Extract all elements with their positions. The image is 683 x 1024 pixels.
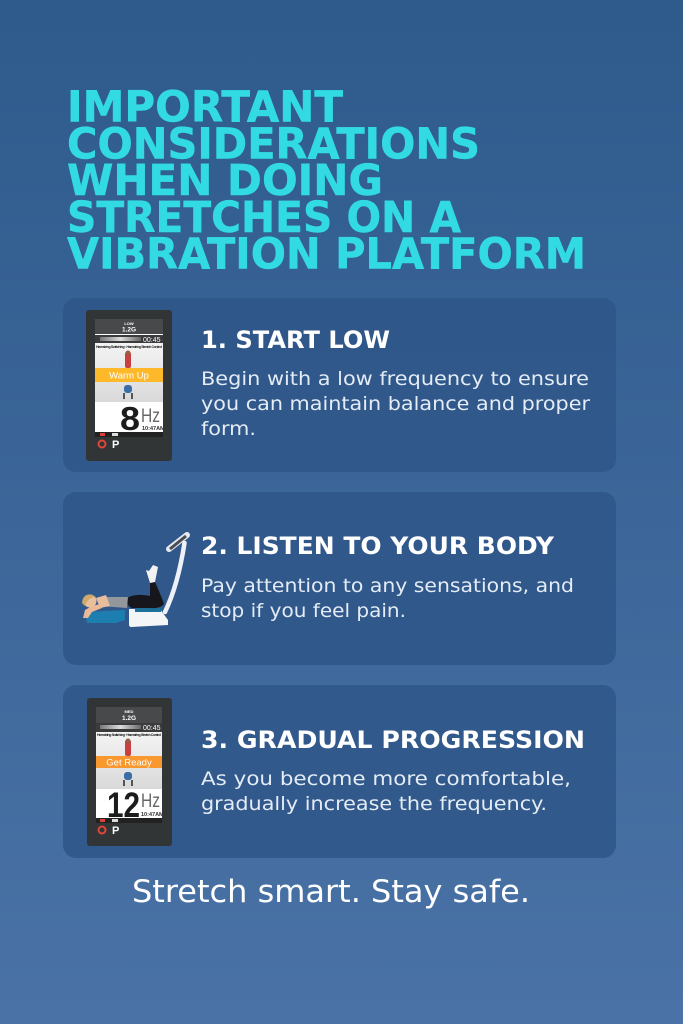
icon: control console showing 12 Hz: 10:47AM (141, 812, 164, 818)
title: IMPORTANT (67, 84, 343, 132)
icon: control console showing 8 Hz: LOW (124, 321, 134, 326)
icon: control console showing 8 Hz: 00:45 (143, 337, 161, 344)
icon: control console showing 12 Hz: Hz (141, 791, 160, 812)
icon: control console showing 12 Hz: Hamstring Switching · Hamstring Stretch Control (97, 733, 161, 737)
icon: control console showing 12 Hz: Get Ready (106, 758, 152, 768)
text: gradual body (201, 768, 571, 815)
panel: gradual progression (63, 685, 616, 858)
icon: woman stretching on vibration platform (82, 535, 187, 627)
title (67, 84, 586, 280)
title: VIBRATION PLATFORM (67, 231, 586, 280)
heading: start low: 1. START LOW (201, 326, 390, 354)
icon: control console showing 12 Hz (87, 698, 172, 846)
icon: control console showing 8 Hz: Warm Up (109, 370, 149, 382)
text: start low body: form. (201, 418, 256, 440)
title: CONSIDERATIONS (67, 120, 480, 169)
text: start low body: Begin with a low frequency to ensure (201, 368, 589, 390)
icon: control console showing 8 Hz: 1.2G (122, 326, 136, 334)
text: gradual body: As you become more comfortable, (201, 768, 571, 790)
text: gradual body: gradually increase the frequency. (201, 793, 547, 815)
icon: control console showing 8 Hz (86, 310, 172, 461)
text: start low body: you can maintain balance and proper (201, 393, 590, 415)
text: start low body (201, 368, 590, 440)
icon: control console showing 8 Hz: 8 (120, 400, 140, 437)
icon: control console showing 8 Hz: 10:47AM (142, 426, 165, 432)
icon: control console showing 12 Hz: 12 (107, 786, 140, 825)
panel: start low (63, 298, 616, 472)
icon: control console showing 12 Hz: 00:45 (143, 725, 161, 732)
heading: listen to your body: 2. LISTEN TO YOUR BODY (201, 532, 555, 560)
title: WHEN DOING (67, 157, 383, 206)
icon: control console showing 12 Hz: 1.2G (122, 715, 136, 722)
text: listen body: Pay attention to any sensations, and (201, 575, 574, 597)
text: listen body: stop if you feel pain. (201, 600, 406, 622)
icon: control console showing 8 Hz: P (112, 439, 119, 451)
icon: control console showing 12 Hz: P (112, 825, 119, 837)
icon: control console showing 8 Hz: Hamstring Switching · Hamstring Stretch Control (96, 345, 162, 349)
panel: listen to your body (63, 492, 616, 665)
closing tagline: Stretch smart. Stay safe. (132, 874, 530, 910)
text: listen body (201, 575, 574, 622)
title: STRETCHES ON A (67, 194, 461, 243)
icon: control console showing 12 Hz: MED (125, 709, 134, 714)
heading: gradual progression: 3. GRADUAL PROGRESSION (201, 726, 585, 754)
icon: control console showing 8 Hz: Hz (141, 406, 160, 427)
